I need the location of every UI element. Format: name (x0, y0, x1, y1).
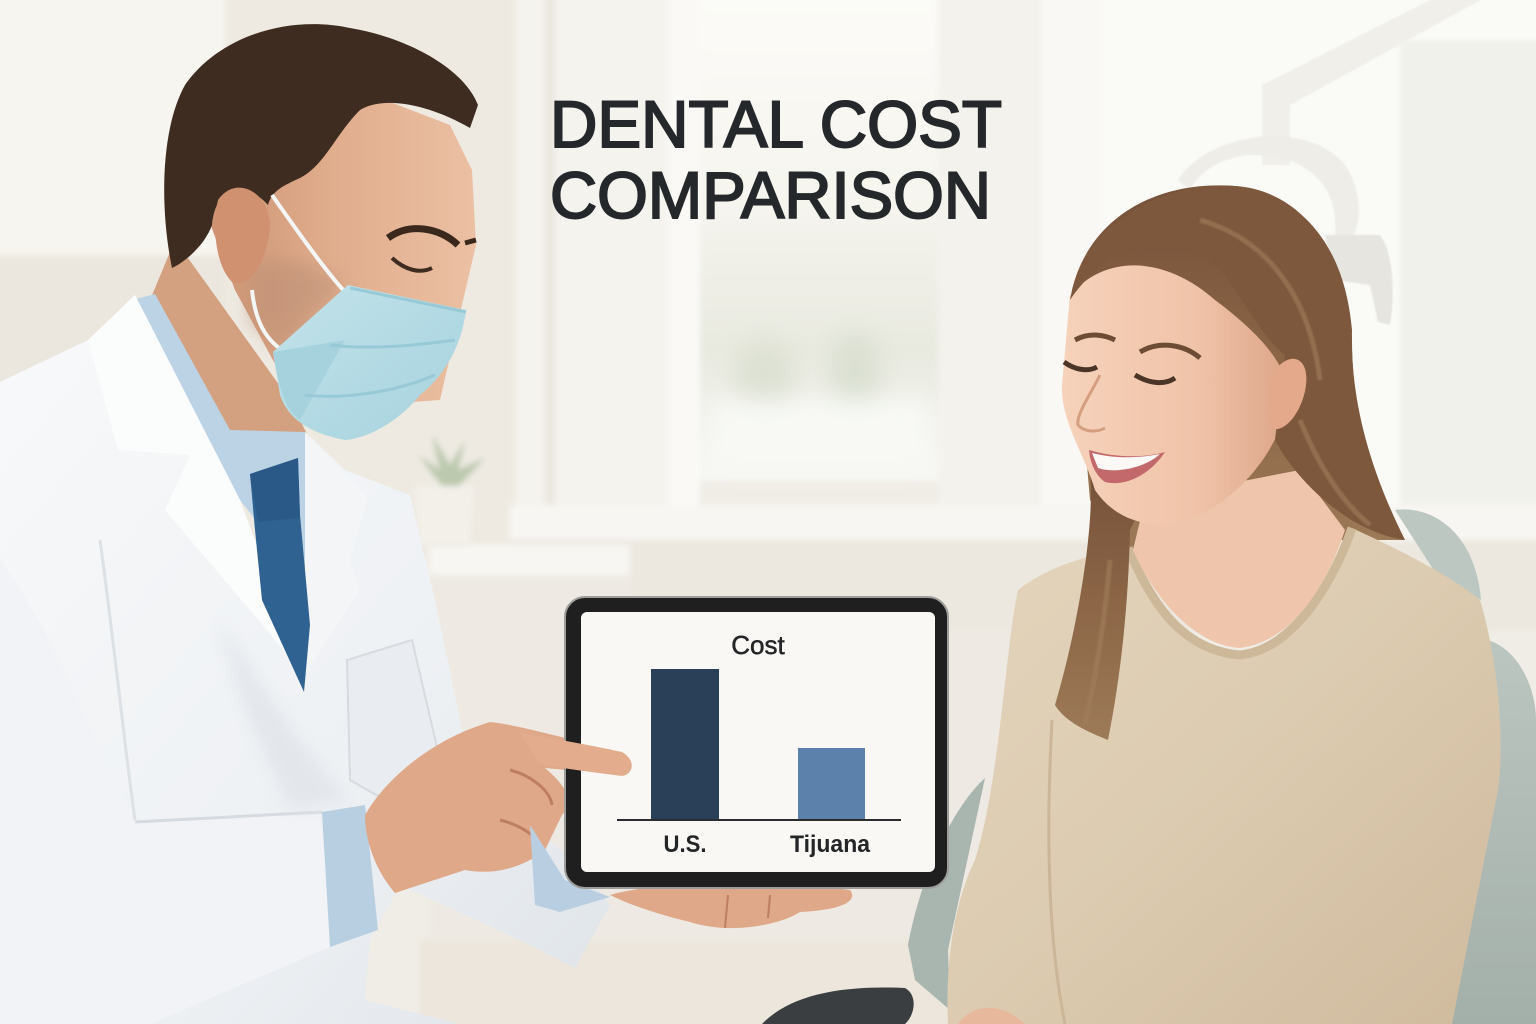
doctor (0, 24, 852, 1024)
title: COMPARISON (550, 158, 991, 232)
hand at bottom (958, 1008, 1025, 1024)
white coat (0, 295, 610, 1024)
tablet (565, 597, 948, 888)
doctor neck and shirt (132, 240, 310, 590)
face (1062, 265, 1290, 525)
ear (1268, 359, 1306, 429)
finger over tablet (520, 733, 632, 776)
sweater (947, 528, 1501, 1024)
label: U.S.: U.S. (664, 831, 706, 858)
hair highlights (1085, 220, 1370, 725)
smile (1089, 450, 1165, 483)
bar: U.S. (651, 669, 719, 820)
doctor hair (164, 24, 478, 268)
title (550, 87, 1002, 232)
tablet screen (581, 612, 935, 872)
surgical mask (273, 285, 466, 440)
doctor face (190, 95, 476, 410)
nose (1078, 375, 1105, 431)
patient (947, 185, 1501, 1024)
brows and eyes (1064, 335, 1200, 383)
tablet frame (565, 597, 948, 888)
neck and chest (1133, 470, 1345, 648)
pointing hand (365, 722, 632, 893)
doctor ear (215, 188, 270, 283)
left sleeve cuff (530, 825, 610, 912)
label: Tijuana: Tijuana (790, 831, 871, 858)
chart heading: Cost (731, 630, 786, 660)
patient chair (762, 509, 1536, 1024)
hair behind (1072, 185, 1405, 560)
title: DENTAL COST (550, 87, 1002, 161)
hair lock over sweater (1055, 470, 1140, 740)
supporting hand (610, 883, 852, 928)
shirt cuff (322, 805, 378, 947)
plant on counter (414, 435, 485, 545)
dental lamp arm (1178, 0, 1490, 325)
doctor eyebrow and eye (388, 229, 476, 271)
bar chart (617, 669, 901, 858)
hair front (1070, 185, 1405, 540)
blue tie (250, 458, 310, 692)
ear loop (252, 195, 345, 352)
stubble shadow (248, 259, 345, 350)
bar: Tijuana (798, 748, 865, 820)
